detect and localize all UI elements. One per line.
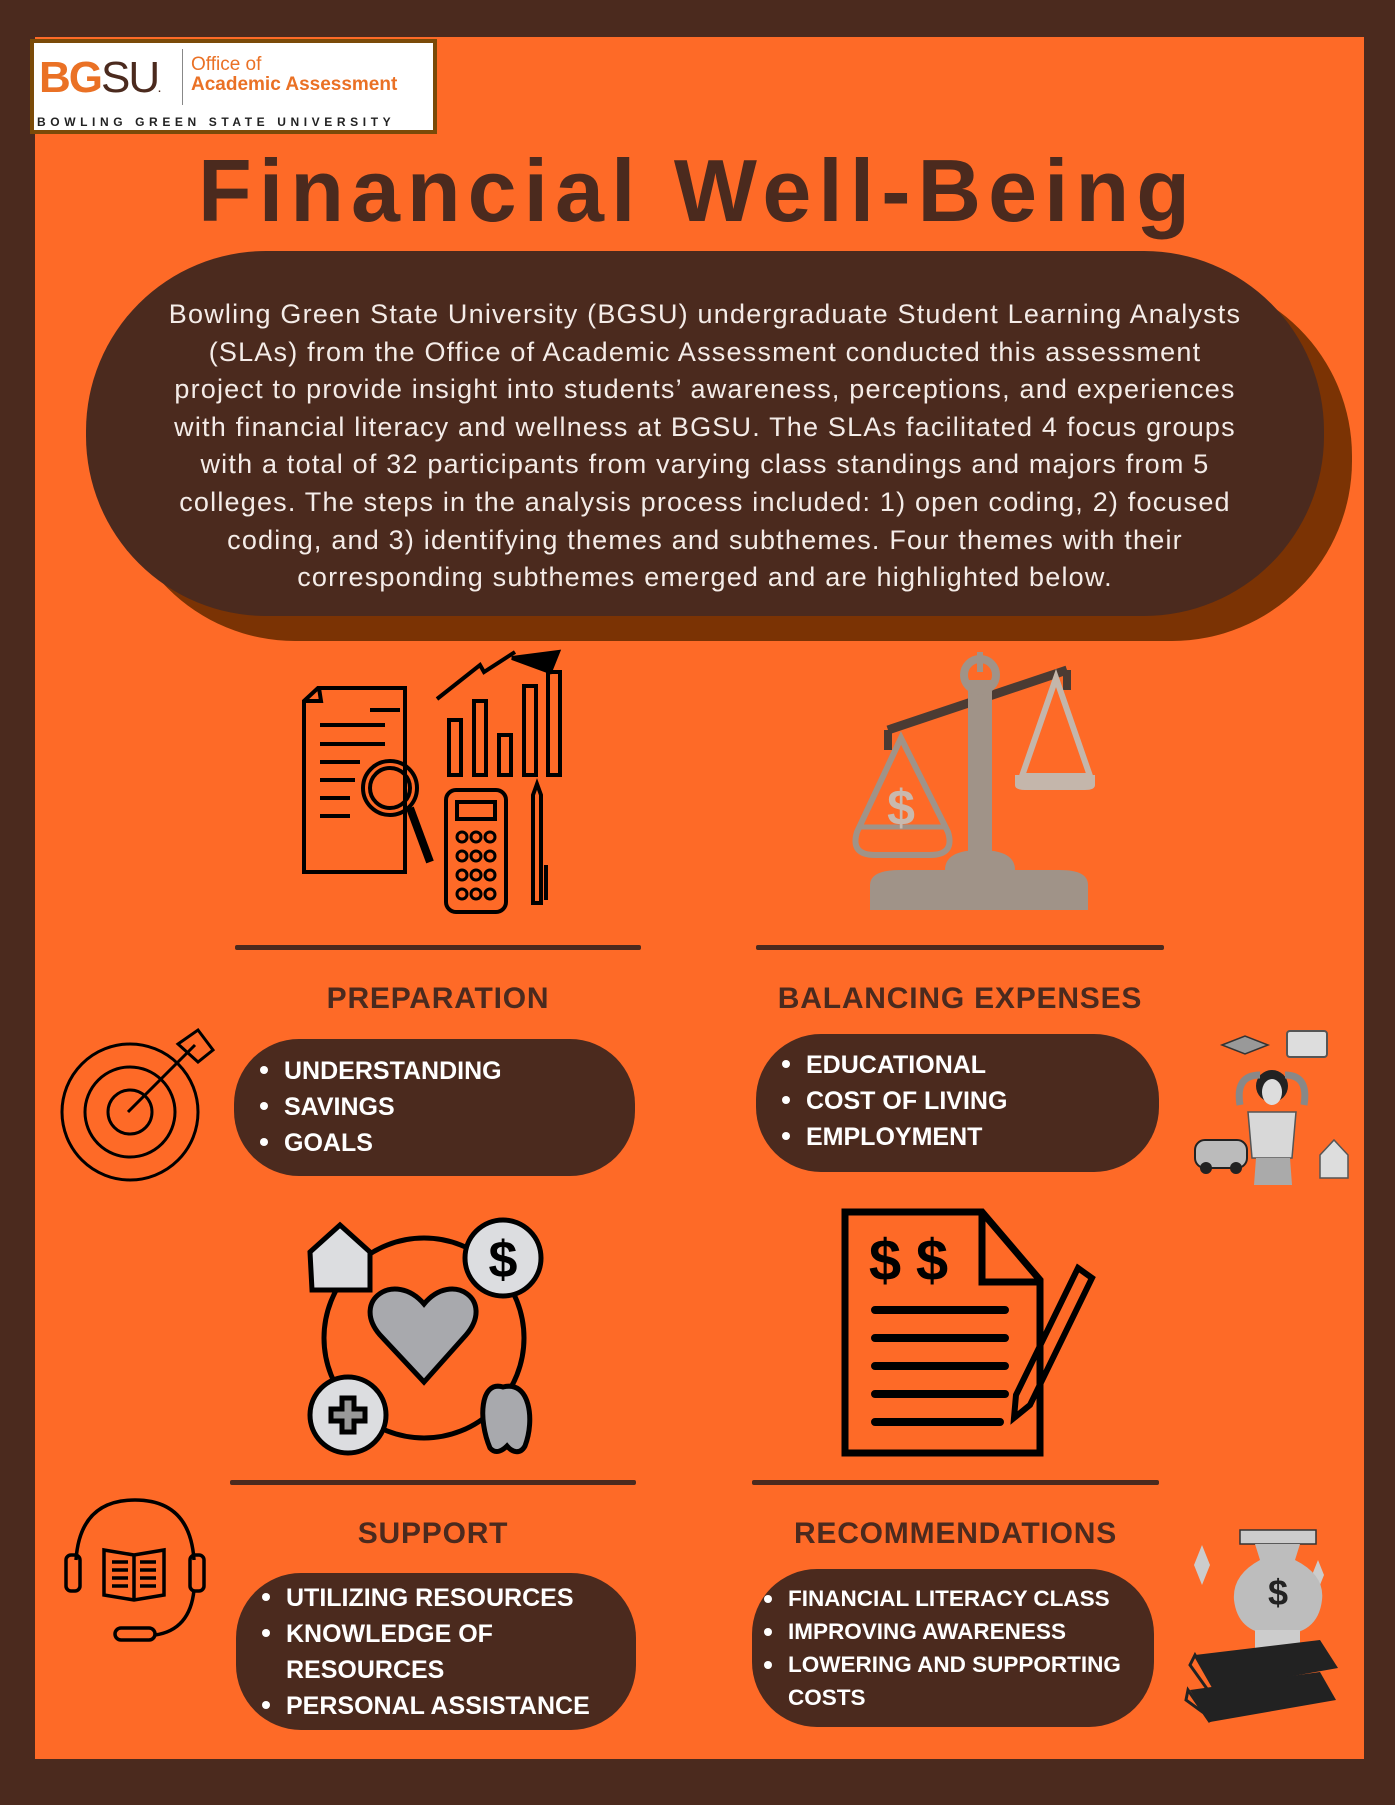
pill: balancing expenses — [756, 1034, 1159, 1172]
icon: balance scale — [855, 652, 1095, 910]
pill: support: RESOURCES — [286, 1656, 444, 1684]
pill: recommendations: IMPROVING AWARENESS — [788, 1619, 1066, 1644]
intro text block — [86, 251, 1324, 616]
pill: preparation: SAVINGS — [284, 1093, 395, 1121]
icon: report with chart and calculator — [304, 652, 560, 912]
pill: support: KNOWLEDGE OF — [286, 1620, 493, 1648]
title: Financial Well-Being — [198, 141, 1197, 240]
intro text block: with financial literacy and wellness at BGSU. The SLAs facilitated 4 focus groups — [174, 412, 1236, 442]
intro text block: coding, and 3) identifying themes and subthemes. Four themes with their — [227, 525, 1183, 555]
icon: wellness circle: $ — [489, 1231, 518, 1289]
icon: invoice with pencil: $ — [869, 1228, 901, 1293]
intro text block: corresponding subthemes emerged and are highlighted below. — [297, 562, 1113, 592]
heading: recommendations: RECOMMENDATIONS — [794, 1517, 1117, 1550]
pill: preparation: GOALS — [284, 1129, 373, 1157]
intro text block: Bowling Green State University (BGSU) undergraduate Student Learning Analysts — [169, 299, 1241, 329]
intro text block: project to provide insight into students’ awareness, perceptions, and experiences — [174, 374, 1236, 404]
pill: recommendations: LOWERING AND SUPPORTING — [788, 1652, 1121, 1677]
logo: Office of — [191, 54, 261, 75]
icon: stressed student — [1195, 1031, 1348, 1185]
heading: preparation: PREPARATION — [327, 982, 549, 1015]
icon: target with arrow — [62, 1030, 213, 1180]
pill: balancing expenses: EMPLOYMENT — [806, 1123, 982, 1151]
logo: Academic Assessment — [191, 74, 397, 95]
pill: recommendations — [752, 1569, 1154, 1727]
intro text block: (SLAs) from the Office of Academic Assessment conducted this assessment — [209, 337, 1201, 367]
pill: recommendations: FINANCIAL LITERACY CLASS — [788, 1586, 1110, 1611]
icon: wellness circle — [310, 1220, 541, 1453]
pill: support: PERSONAL ASSISTANCE — [286, 1692, 590, 1720]
logo — [30, 39, 437, 134]
pill: preparation — [234, 1039, 635, 1176]
pill: recommendations: COSTS — [788, 1685, 866, 1710]
pill: balancing expenses: EDUCATIONAL — [806, 1051, 986, 1079]
pill: balancing expenses: COST OF LIVING — [806, 1087, 1007, 1115]
icon: money bag on books — [1186, 1530, 1338, 1722]
intro text block: with a total of 32 participants from varying class standings and majors from 5 — [200, 449, 1210, 479]
logo: BOWLING GREEN STATE UNIVERSITY — [37, 115, 395, 129]
icon: headset with book — [66, 1500, 204, 1640]
icon: invoice with pencil — [845, 1212, 1092, 1453]
logo: BGSU. — [39, 53, 159, 102]
heading: balancing expenses: BALANCING EXPENSES — [778, 982, 1142, 1015]
intro text block: colleges. The steps in the analysis process included: 1) open coding, 2) focused — [179, 487, 1231, 517]
intro shadow — [115, 276, 1352, 641]
icon: money bag on books: $ — [1268, 1572, 1288, 1613]
icon: balance scale: $ — [887, 780, 915, 836]
icon: invoice with pencil: $ — [916, 1228, 948, 1293]
pill: support: UTILIZING RESOURCES — [286, 1584, 574, 1612]
pill: support — [236, 1573, 636, 1730]
pill: preparation: UNDERSTANDING — [284, 1057, 502, 1085]
heading: support: SUPPORT — [358, 1517, 508, 1550]
